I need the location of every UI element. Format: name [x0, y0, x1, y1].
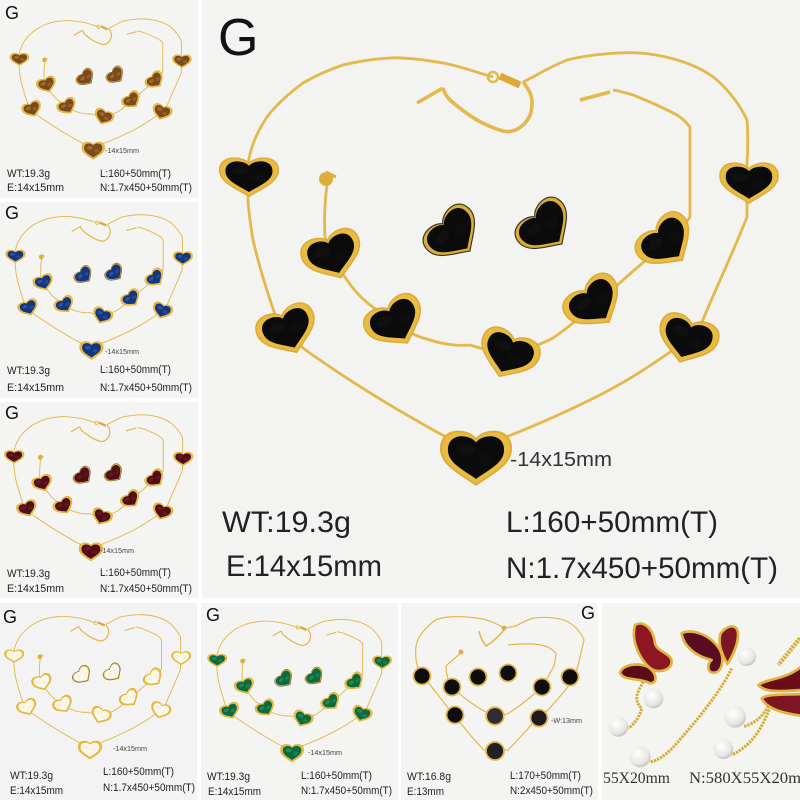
panel 5 specs: [207, 770, 392, 798]
panel 3 necklace: [4, 415, 193, 561]
panel 6 specs: [407, 770, 593, 798]
panel 3 specs: E:14x15mm: [7, 583, 64, 595]
panel: blue heart set: [0, 202, 198, 398]
panel 5 specs: N:1.7x450+50mm(T): [301, 785, 392, 797]
panel 6 necklace: [414, 617, 584, 760]
panel 1 letter: G: [5, 3, 19, 23]
panel 4 letter: G: [3, 607, 17, 627]
panel: tiger-eye heart set: [0, 0, 198, 198]
panel 4 specs: [10, 766, 195, 797]
panel 2 necklace: [6, 215, 193, 359]
panel 2 letter: G: [5, 203, 19, 223]
panel 6 specs: E:13mm: [407, 786, 444, 798]
panel 3 specs: WT:19.3g: [7, 568, 50, 580]
butterfly partial size text: 55X20mm: [603, 770, 671, 787]
butterfly wings: [620, 624, 800, 716]
panel: butterfly earrings: [602, 603, 800, 800]
panel 2 specs: [7, 364, 192, 394]
panel 5 specs: WT:19.3g: [207, 771, 250, 783]
pearls: [608, 647, 756, 767]
panel 6 letter: G: [581, 603, 595, 623]
panel 3 letter: G: [5, 403, 19, 423]
panel 1 specs: [7, 168, 192, 194]
panel: white shell heart set: [0, 603, 197, 800]
main spec text: N:1.7x450+50mm(T): [506, 552, 778, 585]
panel 3 specs: L:160+50mm(T): [100, 567, 171, 579]
main necklace illustration: [220, 53, 778, 485]
panel 5 specs: E:14x15mm: [208, 786, 261, 798]
panel 4 size callout: -14x15mm: [113, 744, 147, 753]
panel: red heart set: [0, 402, 198, 598]
panel 6 specs: L:170+50mm(T): [510, 770, 581, 782]
panel 1 necklace: [10, 19, 191, 159]
panel 4 specs: E:14x15mm: [10, 785, 63, 797]
panel 5 size callout: -14x15mm: [308, 748, 342, 757]
panel 5 specs: L:160+50mm(T): [301, 770, 372, 782]
main spec text: L:160+50mm(T): [506, 506, 718, 539]
panel 4 specs: WT:19.3g: [10, 770, 53, 782]
panel 5 letter: G: [206, 605, 220, 625]
panel 3 specs: [7, 567, 192, 595]
panel 1 specs: E:14x15mm: [7, 182, 64, 194]
panel: green heart set: [201, 603, 398, 800]
panel 1 size callout: -14x15mm: [105, 146, 139, 155]
panel 4 necklace: [4, 615, 191, 759]
main spec text: WT:19.3g: [222, 506, 351, 539]
panel 3 size callout: -14x15mm: [100, 546, 134, 555]
panel 2 specs: E:14x15mm: [7, 382, 64, 394]
panel: main black heart set: [202, 0, 800, 598]
panel 2 specs: L:160+50mm(T): [100, 364, 171, 376]
panel 1 specs: N:1.7x450+50mm(T): [100, 182, 192, 194]
panel 2 size callout: -14x15mm: [105, 347, 139, 356]
panel 2 specs: WT:19.3g: [7, 365, 50, 377]
main size callout: -14x15mm: [510, 449, 612, 471]
panel 5 necklace: [207, 619, 392, 762]
panel 1 specs: L:160+50mm(T): [100, 168, 171, 180]
main panel letter G: G: [218, 9, 258, 67]
panel 6 size callout: -W:13mm: [551, 716, 582, 725]
panel 4 specs: L:160+50mm(T): [103, 766, 174, 778]
butterfly earrings illustration: [608, 624, 800, 767]
panel: black round set: [401, 603, 598, 800]
panel 1 specs: WT:19.3g: [7, 168, 50, 180]
panel 6 specs: WT:16.8g: [407, 771, 451, 783]
butterfly partial size text: [603, 770, 800, 787]
gold chains: [628, 638, 800, 762]
panel 6 specs: N:2x450+50mm(T): [510, 785, 593, 797]
main spec text: [222, 506, 778, 585]
panel 3 specs: N:1.7x450+50mm(T): [100, 583, 192, 595]
panel 4 specs: N:1.7x450+50mm(T): [103, 782, 195, 794]
panel 2 specs: N:1.7x450+50mm(T): [100, 382, 192, 394]
main spec text: E:14x15mm: [226, 550, 382, 583]
